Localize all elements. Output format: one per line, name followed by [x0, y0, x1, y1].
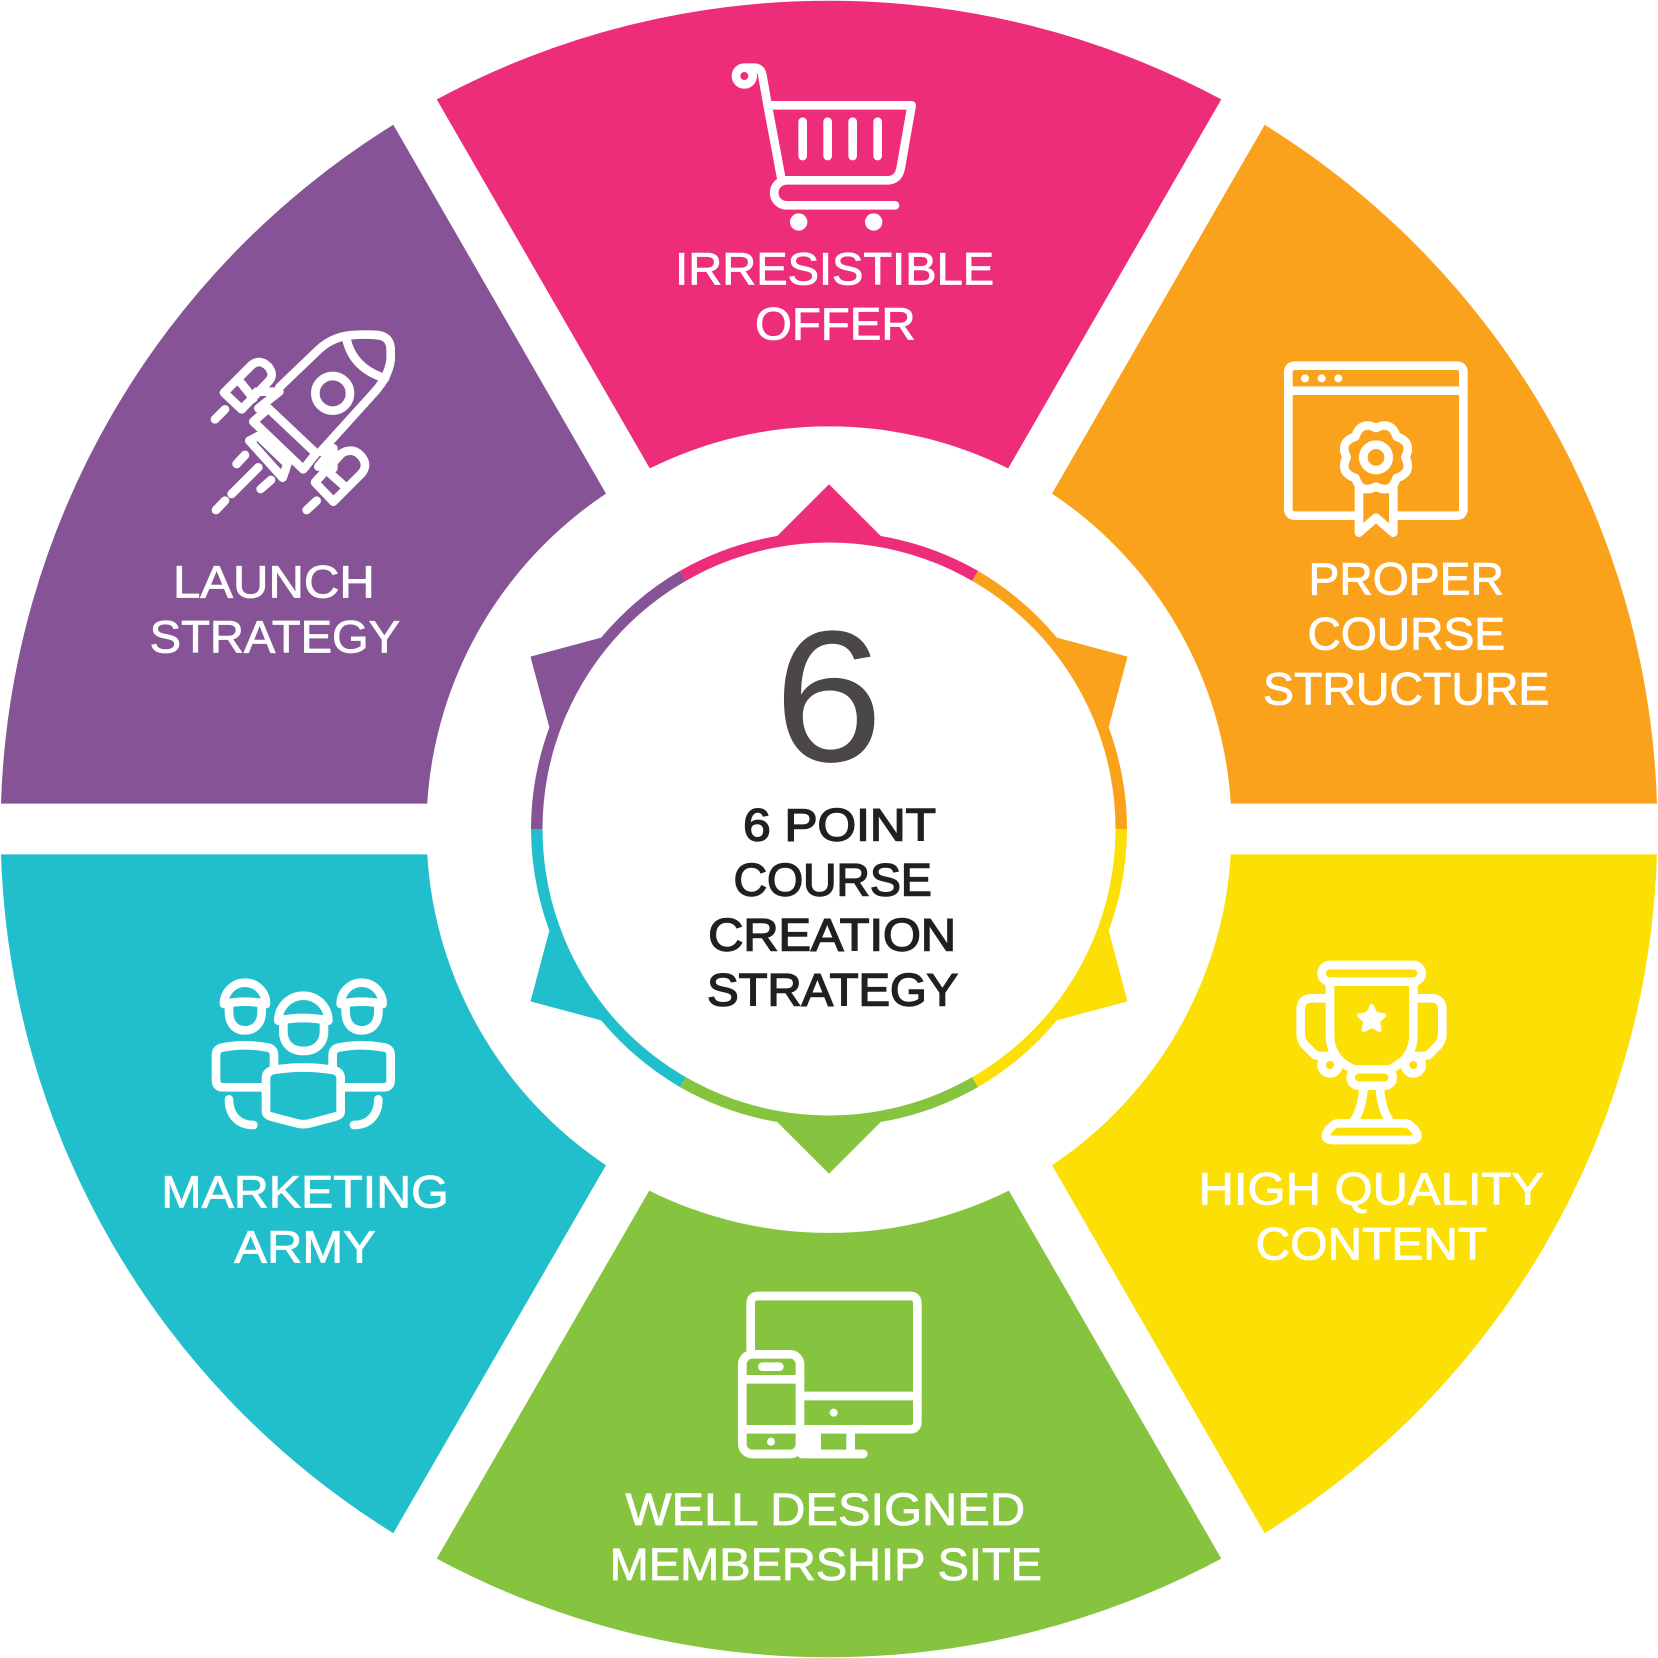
title: 6 point course creation strategy: COURSE [734, 855, 932, 906]
segment: orange [1052, 125, 1657, 804]
label: well designed membership site [610, 1484, 1042, 1590]
label: launch strategy [150, 556, 400, 662]
segment: yellow [1052, 854, 1657, 1533]
label: marketing army [161, 1167, 449, 1273]
segment: green [437, 1191, 1221, 1657]
panel: launch strategy [1, 125, 606, 804]
label: launch strategy: LAUNCH [173, 556, 375, 608]
title: 6 point course creation strategy [707, 800, 958, 1016]
label: high quality content: HIGH QUALITY [1198, 1163, 1544, 1214]
label: proper course structure: COURSE [1308, 608, 1505, 659]
label: high quality content: CONTENT [1256, 1218, 1487, 1269]
label: proper course structure [1263, 553, 1549, 714]
big numeral 6: 6 [774, 592, 883, 801]
panel: proper course structure [1052, 125, 1657, 804]
label: irresistible offer: IRRESISTIBLE [675, 244, 994, 294]
hub spike: orange [754, 528, 1202, 958]
label: marketing army: ARMY [234, 1222, 376, 1273]
icon: shopping cart [736, 68, 912, 231]
title: 6 point course creation strategy: 6 POINT [743, 800, 936, 851]
title: 6 point course creation strategy: CREATION [708, 910, 956, 961]
hub spike: purple [456, 528, 904, 958]
icon: devices [742, 1296, 917, 1454]
hub spike: green [680, 829, 978, 1174]
hub spike: pink [680, 484, 978, 829]
icon: trophy [1301, 965, 1442, 1140]
panel: irresistible offer [437, 1, 1221, 468]
segment: cyan [1, 854, 606, 1533]
label: marketing army: MARKETING [161, 1167, 449, 1218]
hub spike: cyan [456, 700, 904, 1130]
icon: browser certificate [1288, 366, 1463, 533]
panel: well designed membership site [437, 1191, 1221, 1657]
hub spike: yellow [754, 700, 1202, 1130]
label: irresistible offer: OFFER [755, 298, 916, 350]
hub white disc [542, 542, 1116, 1116]
label: irresistible offer [675, 244, 994, 350]
label: well designed membership site: WELL DESIGNED [626, 1484, 1025, 1535]
panel: marketing army [1, 854, 606, 1533]
segment: purple [1, 125, 606, 804]
label: launch strategy: STRATEGY [150, 612, 400, 662]
icon: team [216, 983, 391, 1125]
label: well designed membership site: MEMBERSHIP SITE [610, 1539, 1042, 1590]
title: 6 point course creation strategy: STRATEGY [707, 965, 958, 1016]
label: proper course structure: STRUCTURE [1263, 663, 1549, 714]
label: proper course structure: PROPER [1308, 553, 1504, 604]
label: high quality content [1198, 1163, 1544, 1269]
segment: pink [437, 1, 1221, 468]
center hub [456, 484, 1202, 1174]
panel: high quality content [1052, 854, 1657, 1533]
icon: rocket [215, 335, 391, 510]
